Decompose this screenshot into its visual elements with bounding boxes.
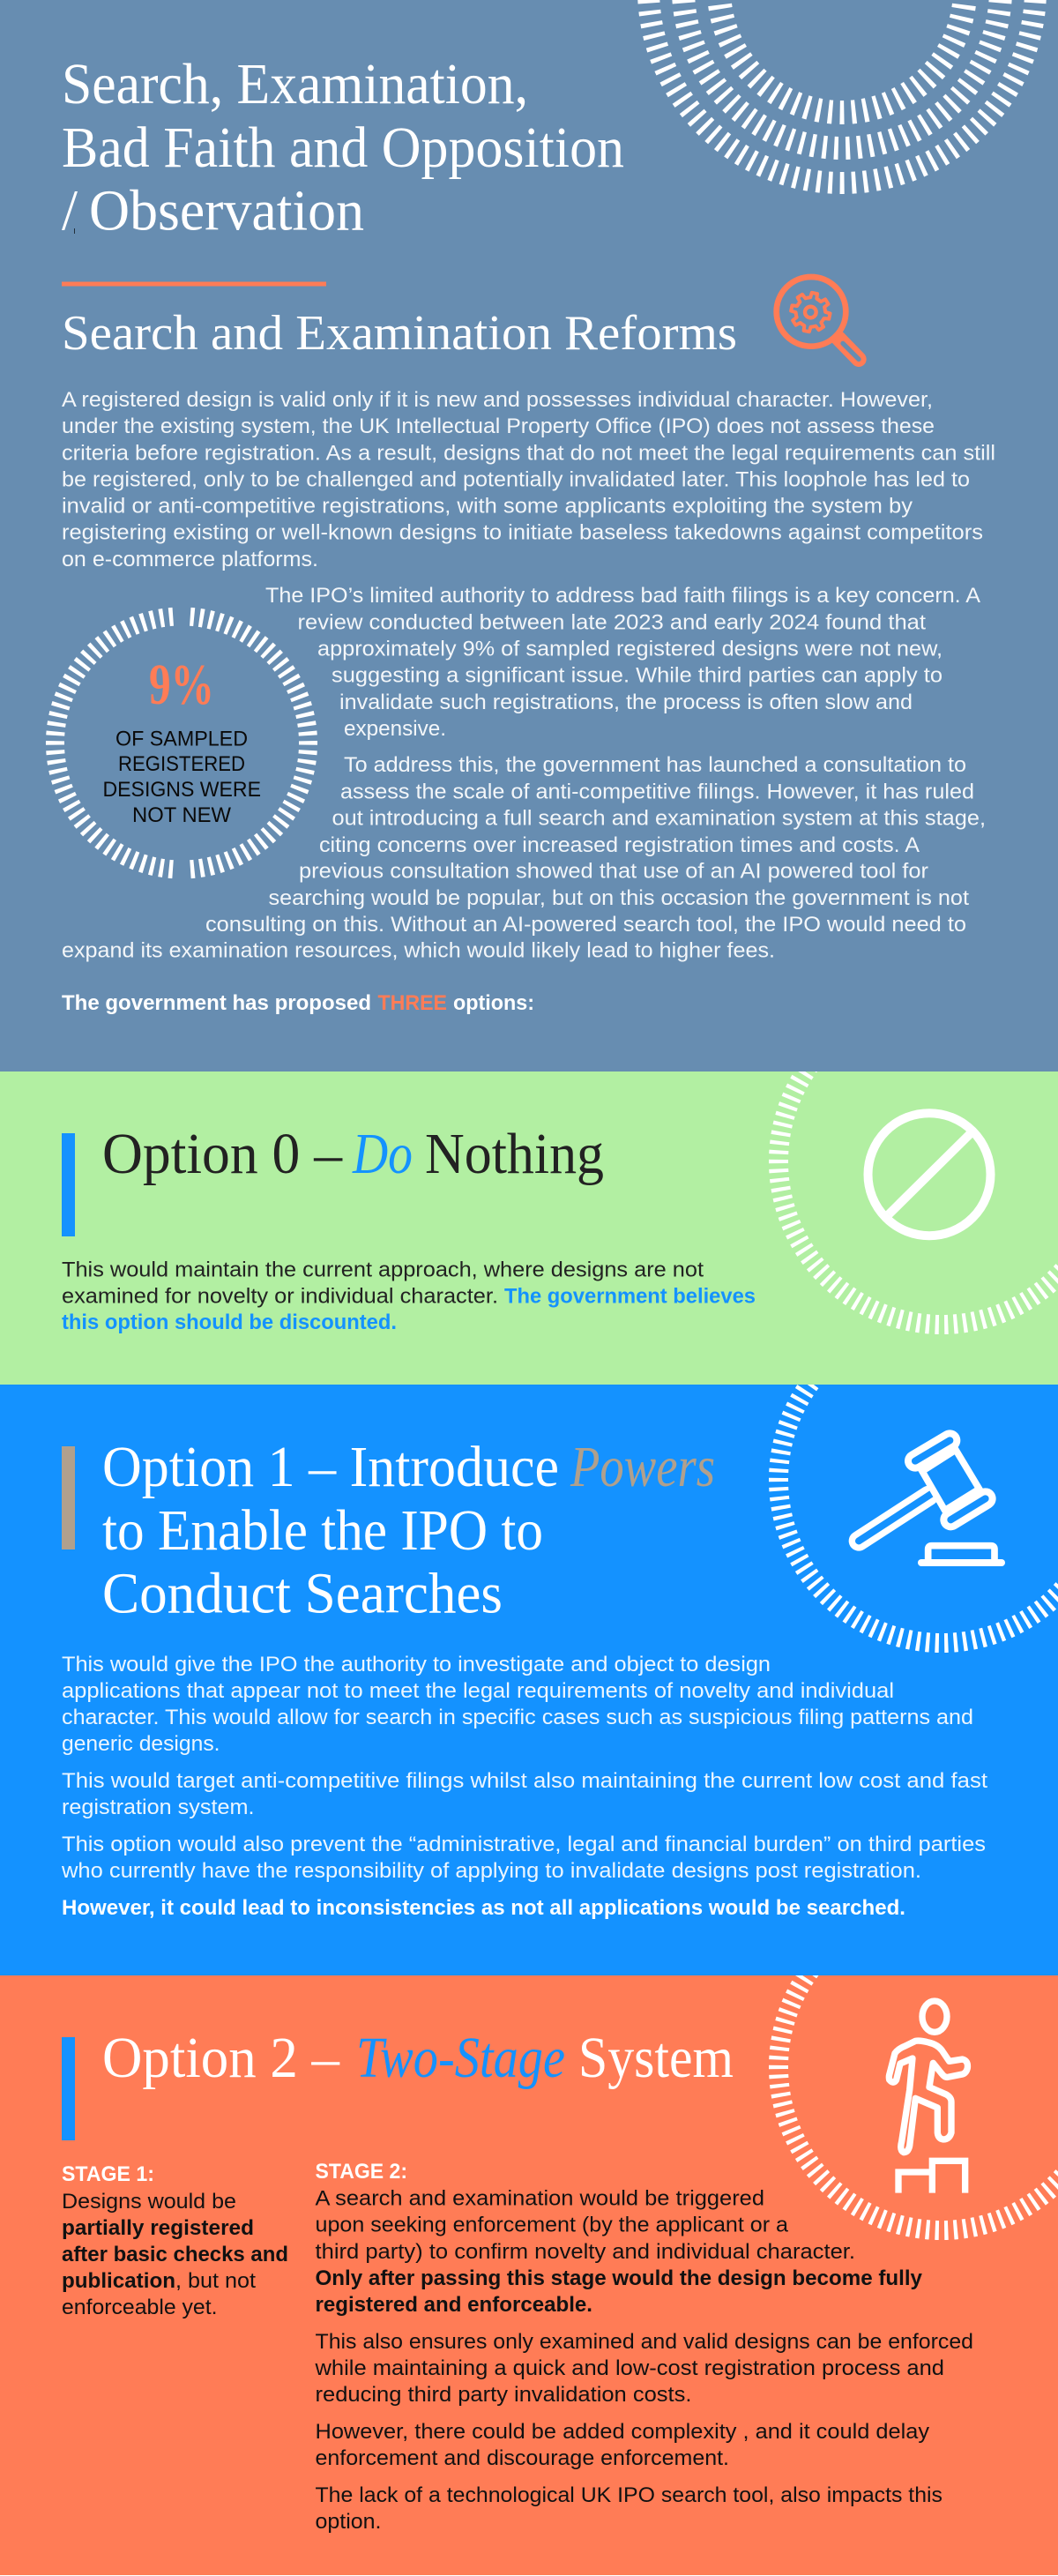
text block: stage 1: publication: [62, 2269, 175, 2293]
text block: stage 2: Only after passing this stage would the design become fully: [316, 2266, 923, 2290]
heading: option 0: Do: [352, 1122, 413, 1186]
text block: option 1 description: who currently have the responsibility of applying to invalidate designs post registration.: [61, 1859, 921, 1883]
text block: consultation: [62, 753, 986, 963]
panel: option 2: [0, 1975, 1058, 2575]
text block: bad faith concern: invalidate such registrations, the process is often slow and: [339, 691, 913, 714]
heading: option 0: [102, 1122, 604, 1186]
stat label: OF SAMPLED: [115, 727, 248, 751]
title: Bad Faith and Opposition: [62, 116, 624, 180]
text block: intro paragraph: [62, 388, 995, 571]
decorative tick ring: [769, 1385, 1058, 1653]
text block: intro paragraph: under the existing system, the UK Intellectual Property Office (IPO) does not assess these: [62, 414, 935, 438]
stat label: DESIGNS WERE: [102, 778, 261, 802]
text block: consultation: expand its examination resources, which would likely lead to higher fees.: [62, 938, 775, 963]
text block: consultation: searching would be popular, but on this occasion the government is not: [268, 886, 969, 910]
icon: person climbing steps: [889, 2001, 967, 2193]
text block: three options lead-in: The government has proposed: [62, 991, 371, 1015]
decorative concentric tick rings: [649, 0, 1035, 183]
heading: option 1: Powers: [570, 1435, 715, 1499]
text block: stage 1: after basic checks and: [62, 2243, 288, 2266]
text block: intro paragraph: on e-commerce platforms.: [62, 548, 318, 571]
text block: bad faith concern: expensive.: [344, 717, 446, 741]
callout: 9% stat ring: [55, 616, 309, 870]
text block: stage 2: third party) to confirm novelty and individual character.: [316, 2240, 855, 2264]
icon: gavel: [859, 1440, 1002, 1563]
text block: stage 2: However, there could be added complexity , and it could delay: [316, 2420, 929, 2444]
heading: option 2: Two-Stage: [356, 2026, 565, 2090]
text block: option 1 description: generic designs.: [62, 1732, 220, 1756]
text block: stage 1: [62, 2162, 288, 2319]
heading: search and examination reforms: Search and Examination Reforms: [62, 306, 737, 361]
text block: consultation: out introducing a full search and examination system at this stage,: [332, 806, 986, 831]
text block: stage 2: [314, 2160, 973, 2534]
text block: option 0 description: [62, 1258, 756, 1334]
text block: option 1 description: This option would also prevent the “administrative, legal and financial burden” on third parties: [62, 1833, 986, 1856]
panel: option 1: [0, 1385, 1058, 1975]
heading: option 2: Option 2 –: [102, 2026, 340, 2090]
text block: option 1 description: applications that appear not to meet the legal requirements of novelty and individual: [62, 1679, 894, 1703]
text block: intro paragraph: criteria before registration. As a result, designs that do not meet the legal requirements can still: [62, 441, 995, 466]
stat label: [102, 727, 261, 827]
heading: option 1: [102, 1435, 715, 1626]
text block: option 0 description: this option should be discounted.: [62, 1310, 397, 1334]
text block: bad faith concern: The IPO’s limited authority to address bad faith filings is a key concern. A: [265, 584, 980, 608]
decorative tick ring: [769, 1071, 1058, 1334]
text block: bad faith concern: review conducted between late 2023 and early 2024 found that: [298, 610, 926, 635]
panel: option 0: [0, 1071, 1058, 1385]
text block: option 1 description: However, it could lead to inconsistencies as not all applications would be searched.: [62, 1896, 905, 1920]
text block: intro paragraph: be registered, only to be challenged and potentially invalidated later. This loophole has led to: [62, 467, 970, 492]
text block: stage 2: reducing third party invalidation costs.: [316, 2383, 691, 2407]
text block: stage 1: Designs would be: [62, 2190, 236, 2214]
heading: option 2: System: [578, 2026, 734, 2090]
text block: consultation: citing concerns over increased registration times and costs. A: [319, 833, 920, 857]
text block: three options lead-in: THREE: [377, 991, 447, 1015]
text block: stage 2: registered and enforceable.: [316, 2293, 592, 2317]
text block: intro paragraph: registering existing or well-known designs to initiate baseless takedowns against competitors: [62, 520, 983, 545]
text block: stage 2: while maintaining a quick and low-cost registration process and: [314, 2356, 944, 2380]
text block: consultation: consulting on this. Without an AI-powered search tool, the IPO would need to: [205, 913, 966, 937]
panel: search and examination reforms: [0, 0, 1058, 1071]
text block: stage 1: partially registered: [62, 2216, 254, 2240]
text block: stage 2: upon seeking enforcement (by the applicant or a: [316, 2214, 789, 2236]
text block: consultation: To address this, the government has launched a consultation to: [344, 753, 966, 777]
stat label: NOT NEW: [132, 803, 231, 827]
text block: stage 2: enforcement and discourage enforcement.: [316, 2446, 729, 2470]
text block: bad faith concern: suggesting a significant issue. While third parties can apply to: [332, 663, 943, 688]
text block: option 0 description: examined for novelty or individual character.: [62, 1284, 498, 1309]
text block: stage 1: , but not: [175, 2269, 256, 2293]
text block: option 1 description: registration system.: [62, 1796, 254, 1819]
text block: stage 2: STAGE 2:: [316, 2160, 407, 2184]
accent bar: [62, 1133, 75, 1236]
text block: option 1 description: [61, 1653, 987, 1920]
heading: option 0: Nothing: [425, 1122, 604, 1186]
title: [62, 52, 624, 243]
text block: bad faith concern: [265, 584, 980, 741]
icon: prohibited sign: [868, 1113, 991, 1236]
text block: stage 2: The lack of a technological UK IPO search tool, also impacts this: [316, 2483, 943, 2507]
text block: stage 2: A search and examination would be triggered: [316, 2187, 764, 2210]
text block: option 1 description: character. This would allow for search in specific cases such as suspicious filing patterns and: [62, 1706, 973, 1729]
text block: option 1 description: This would target anti-competitive filings whilst also maintaining the current low cost and fast: [62, 1769, 987, 1793]
text block: option 0 description: The government believes: [504, 1284, 756, 1309]
decorative tick ring: [769, 1975, 1058, 2240]
text block: intro paragraph: invalid or anti-competitive registrations, with some applicants exploiting the system by: [62, 494, 913, 519]
icon: magnifier with gear: [777, 277, 859, 359]
heading: option 1: Conduct Searches: [102, 1561, 503, 1626]
text block: three options lead-in: [62, 991, 534, 1015]
accent bar: [62, 1446, 75, 1549]
stat: 9%: 9%: [149, 653, 214, 717]
text block: consultation: previous consultation showed that use of an AI powered tool for: [299, 859, 928, 884]
text block: stage 2: option.: [316, 2510, 381, 2534]
tick ring: [55, 616, 309, 870]
text block: three options lead-in: options:: [453, 991, 534, 1015]
heading: option 1: Option 1 – Introduce: [102, 1435, 559, 1499]
heading: option 0: Option 0 –: [102, 1122, 343, 1186]
text block: option 1 description: This would give the IPO the authority to investigate and object to design: [62, 1653, 771, 1676]
heading: option 2: [102, 2026, 734, 2090]
text block: stage 2: This also ensures only examined and valid designs can be enforced: [316, 2330, 973, 2354]
title: Search, Examination,: [62, 52, 528, 116]
accent bar: [62, 2037, 75, 2140]
title: /: [62, 178, 78, 243]
heading rule: [62, 282, 326, 286]
text block: option 0 description: This would maintain the current approach, where designs are not: [62, 1258, 704, 1282]
text block: stage 1: STAGE 1:: [62, 2162, 154, 2186]
text block: bad faith concern: approximately 9% of sampled registered designs were not new,: [317, 637, 943, 661]
title: Observation: [89, 178, 364, 243]
text block: stage 1: enforceable yet.: [62, 2296, 217, 2319]
heading: option 1: to Enable the IPO to: [102, 1498, 543, 1563]
text block: consultation: assess the scale of anti-competitive filings. However, it has ruled: [340, 780, 974, 804]
text block: intro paragraph: A registered design is valid only if it is new and possesses individual character. However,: [62, 388, 933, 412]
stat label: REGISTERED: [118, 752, 245, 776]
